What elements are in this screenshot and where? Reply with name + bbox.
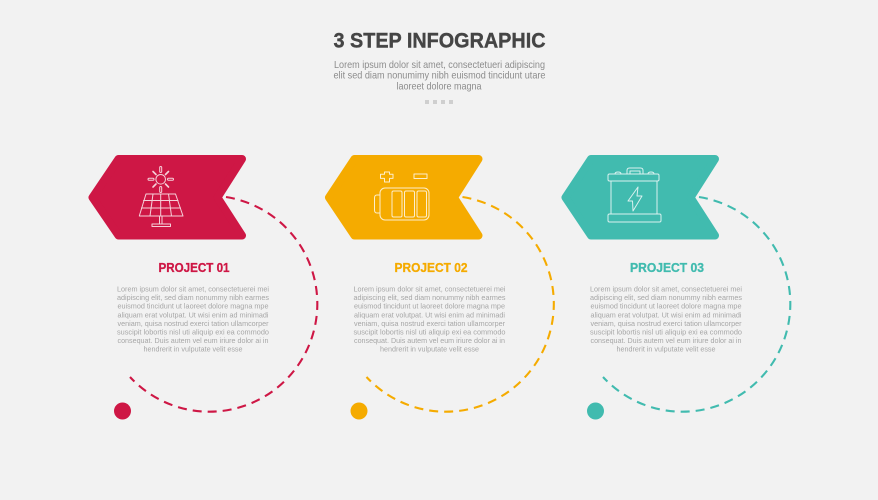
body text: aliquam erat volutpat. Ut wisi enim ad minimadi (118, 310, 269, 319)
body text (590, 284, 742, 354)
end dot (587, 402, 604, 420)
body text: euismod tincidunt ut laoreet dolore magna mpe (118, 302, 268, 311)
body text: veniam, quisa nostrud exerci tation ullamcorper (118, 319, 269, 328)
end dot (350, 402, 368, 420)
body text: hendrerit in vulputate velit esse (380, 345, 479, 354)
panel: project 03 (566, 159, 790, 420)
body text: veniam, quisa nostrud exerci tation ullamcorper (354, 319, 506, 328)
body text: consequat. Duis autem vel eum iriure dolor ai in (590, 336, 742, 345)
body text: consequat. Duis autem vel eum iriure dolor ai in (118, 336, 268, 345)
heading: PROJECT 03 (630, 261, 704, 275)
body text: euismod tincidunt ut laoreet dolore magna mpe (590, 302, 742, 311)
body text (354, 284, 506, 354)
body text: hendrerit in vulputate velit esse (616, 345, 716, 354)
subtitle: Lorem ipsum dolor sit amet, consectetueri adipiscing (334, 60, 545, 71)
subtitle (334, 60, 546, 92)
subtitle: elit sed diam nonumimy nibh euismod tincidunt utare (334, 70, 546, 82)
body text: adipiscing elit, sed diam nonummy nibh earmes (354, 293, 506, 302)
body text: euismod tincidunt ut laoreet dolore magna mpe (354, 302, 505, 311)
dashed arc (603, 197, 790, 412)
body text: consequat. Duis autem vel eum iriure dolor ai in (354, 336, 505, 345)
body text: suscipit lobortis nisl uti aliquip exi ea commodo (117, 328, 269, 336)
dots indicator (425, 100, 453, 104)
body text: aliquam erat volutpat. Ut wisi enim ad minimadi (354, 310, 505, 319)
arrow banner teal (566, 159, 715, 236)
panel: project 02 (329, 159, 554, 420)
title: 3 STEP INFOGRAPHIC (334, 28, 546, 52)
icon: battery (374, 172, 429, 220)
end dot (114, 402, 131, 420)
body text: veniam, quisa nostrud exerci tation ullamcorper (590, 319, 742, 328)
heading: PROJECT 01 (158, 261, 230, 275)
body text: aliquam erat volutpat. Ut wisi enim ad minimadi (590, 310, 742, 319)
body text: hendrerit in vulputate velit esse (144, 345, 242, 354)
header (334, 28, 546, 104)
body text: Lorem ipsum dolor sit amet, consectetuerei mei (354, 284, 506, 294)
dashed arc (130, 197, 317, 412)
icon: solar panel (139, 166, 183, 226)
panel: project 01 (92, 159, 317, 420)
body text: adipiscing elit, sed diam nonummy nibh earmes (117, 293, 269, 302)
body text: suscipit lobortis nisl uti aliquip exi ea commodo (354, 328, 506, 336)
dashed arc (366, 197, 554, 412)
heading: PROJECT 02 (394, 261, 468, 275)
arrow banner red (92, 159, 242, 236)
arrow banner yellow (329, 159, 478, 236)
body text (117, 284, 269, 354)
body text: Lorem ipsum dolor sit amet, consectetuerei mei (590, 284, 742, 294)
body text: adipiscing elit, sed diam nonummy nibh earmes (590, 293, 742, 302)
icon: car battery (608, 168, 661, 222)
body text: Lorem ipsum dolor sit amet, consectetuerei mei (117, 284, 269, 294)
body text: suscipit lobortis nisl uti aliquip exi ea commodo (590, 328, 742, 336)
subtitle: laoreet dolore magna (396, 82, 482, 92)
